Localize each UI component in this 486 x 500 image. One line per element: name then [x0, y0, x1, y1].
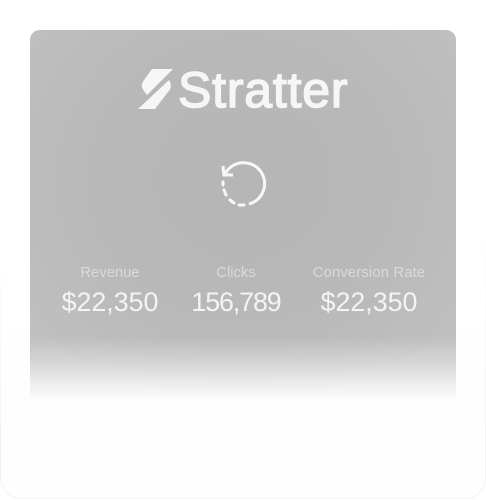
label: Conversion Rate: Conversion Rate [313, 265, 425, 281]
label: Revenue: Revenue [80, 265, 140, 281]
panel: grey dashboard [30, 30, 456, 402]
icon: Stratter logo mark [138, 69, 173, 109]
value: Clicks: 156,789 [191, 287, 281, 317]
icon: loading refresh [222, 161, 266, 206]
metric: Conversion Rate [313, 265, 425, 317]
label: Clicks: Clicks [216, 265, 256, 281]
outer card [0, 372, 486, 499]
value: Conversion Rate: $22,350 [321, 287, 417, 317]
metric: Clicks [191, 265, 281, 317]
heading: Stratter logo: Stratter [178, 62, 348, 118]
metric: Revenue [62, 265, 158, 317]
value: Revenue: $22,350 [62, 287, 158, 317]
